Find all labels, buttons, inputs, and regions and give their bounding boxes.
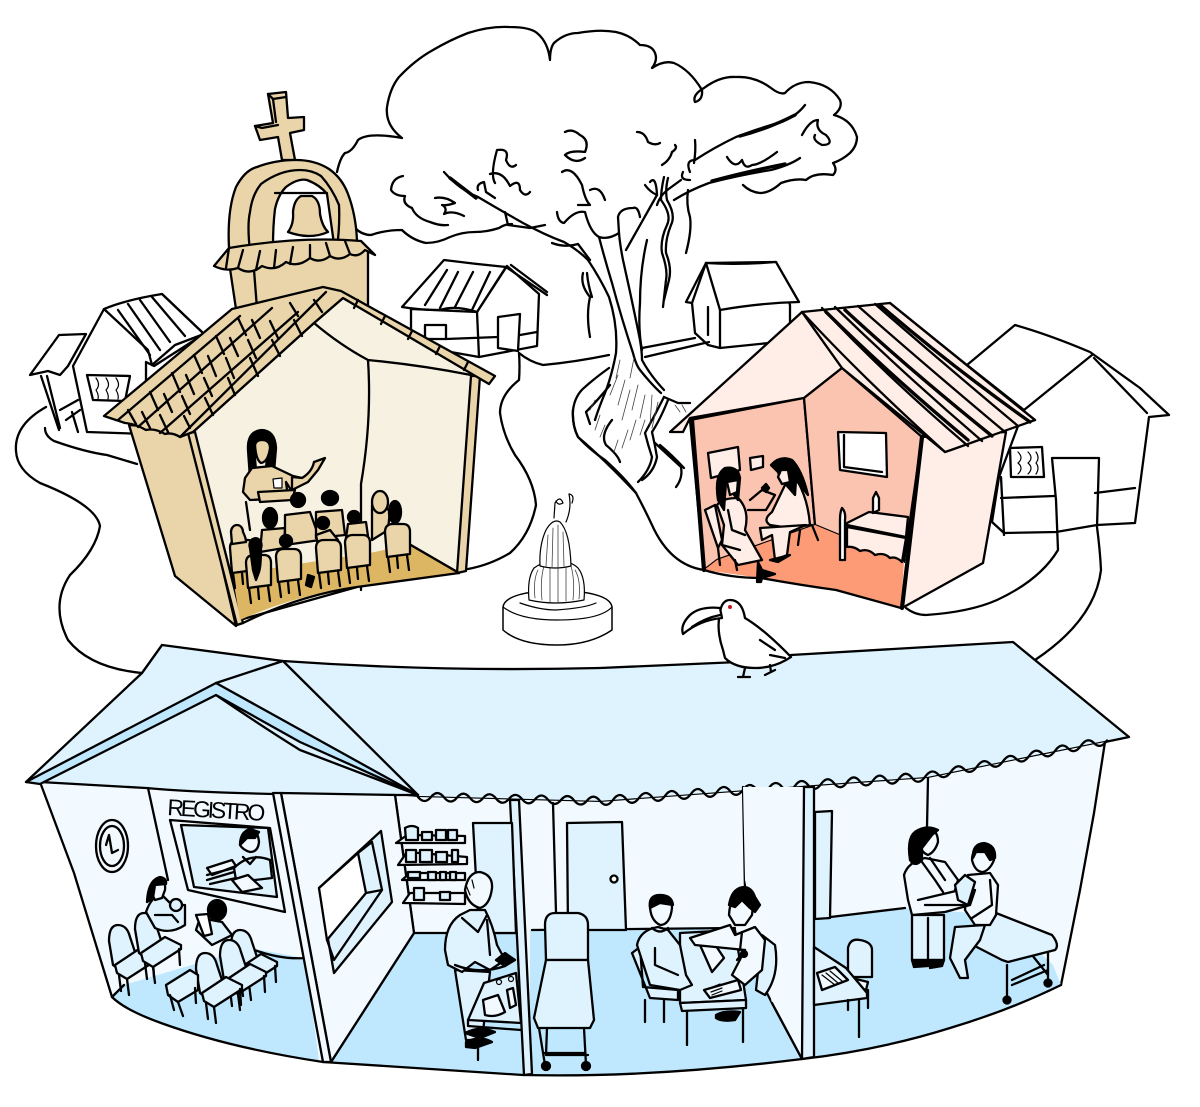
woman reading xyxy=(196,900,232,945)
pharmacy table xyxy=(468,973,521,1060)
wall pictures xyxy=(708,447,763,478)
front pillars xyxy=(188,432,243,625)
back wall xyxy=(804,368,922,562)
corrugated roof xyxy=(802,303,1035,452)
gable xyxy=(670,312,842,432)
nurse taking blood pressure xyxy=(904,828,975,968)
toucan xyxy=(682,600,791,677)
registration window xyxy=(170,820,285,912)
tree canopy xyxy=(337,27,857,243)
window xyxy=(838,432,887,477)
house: left thatched xyxy=(30,294,204,434)
village roads xyxy=(16,338,1101,673)
bed xyxy=(840,492,908,562)
nurse giving vaccine xyxy=(748,458,818,562)
clock xyxy=(96,820,128,872)
tower small roof xyxy=(214,240,375,272)
exam bench xyxy=(967,913,1057,1004)
floors xyxy=(112,906,1060,1074)
left wall xyxy=(690,398,815,570)
medicine shelves xyxy=(396,826,467,904)
doctor xyxy=(690,887,776,1021)
clinic roof xyxy=(26,642,1129,802)
patient at table xyxy=(632,895,692,1022)
desk right room xyxy=(814,940,872,1037)
patterned window xyxy=(1010,447,1044,477)
door xyxy=(498,314,520,351)
tree xyxy=(337,27,857,493)
church cross xyxy=(255,92,304,160)
registro sign: REGISTRO xyxy=(167,794,266,826)
house: centre left xyxy=(402,260,547,357)
tree squiggles xyxy=(391,120,830,225)
partition walls xyxy=(148,778,928,933)
seated woman xyxy=(705,468,775,582)
interior walls xyxy=(193,298,475,619)
doors xyxy=(473,811,832,933)
church xyxy=(104,92,495,626)
pharmacist xyxy=(445,872,515,1048)
patient child xyxy=(950,843,998,978)
lectern xyxy=(258,490,295,502)
pillars xyxy=(692,420,922,608)
house: right small xyxy=(686,262,799,348)
gable trim xyxy=(26,683,418,795)
mother with baby xyxy=(146,877,185,931)
scalloped eave xyxy=(418,740,1107,805)
floor xyxy=(704,525,904,608)
audience chairs and people xyxy=(230,491,410,603)
side window xyxy=(319,831,392,973)
tree trunk xyxy=(444,105,805,420)
awning shelter xyxy=(30,334,86,432)
bell xyxy=(288,196,328,236)
house: right large xyxy=(967,325,1169,535)
floor xyxy=(232,544,459,620)
consultation table xyxy=(680,930,746,1045)
church tile roof xyxy=(104,287,495,437)
window with pattern xyxy=(87,375,130,401)
gable front xyxy=(40,695,418,795)
health clinic xyxy=(26,642,1129,1100)
receptionist xyxy=(207,829,272,892)
pink house: vaccination room xyxy=(670,303,1035,608)
window xyxy=(425,325,446,339)
hanging vines xyxy=(582,177,690,337)
tower body xyxy=(229,250,368,360)
examination bed xyxy=(534,913,594,1070)
right wall xyxy=(902,432,1006,608)
church side wall xyxy=(129,425,236,626)
clinic floor edge xyxy=(112,985,1061,1075)
clinic back walls xyxy=(40,742,1105,1075)
waiting chairs xyxy=(109,913,277,1023)
teacher xyxy=(243,430,325,530)
tree roots xyxy=(573,358,690,493)
bell tower arch xyxy=(229,160,357,251)
fountain xyxy=(503,494,612,645)
